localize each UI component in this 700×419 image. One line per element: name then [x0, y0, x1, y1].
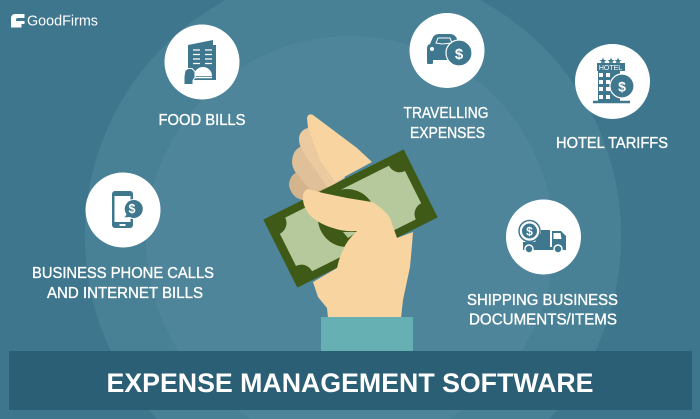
icon: car with dollar coin: $ [455, 46, 464, 63]
cuff [321, 317, 413, 351]
item: business phone calls: AND INTERNET BILLS [47, 285, 203, 302]
label: TRAVELLING [404, 105, 488, 122]
title banner [9, 351, 692, 410]
icon: hotel with dollar coin: HOTEL [599, 65, 622, 72]
icon: truck with dollar coin: $ [526, 224, 533, 238]
icon: hotel with dollar coin [575, 44, 650, 119]
banknote [263, 149, 438, 288]
label: FOOD BILLS [158, 112, 246, 129]
item: food bills [158, 24, 246, 129]
logo: GoodFirms: GoodFirms [27, 14, 98, 30]
item: shipping: DOCUMENTS/ITEMS [469, 312, 617, 328]
back fingers [289, 114, 372, 205]
icon: menu and cloche [164, 24, 240, 100]
illustration: hand holding banknote [263, 114, 438, 351]
label: HOTEL TARIFFS [556, 135, 668, 152]
icon: phone with dollar bubble [86, 172, 160, 248]
icon: phone with dollar bubble: $ [129, 202, 136, 216]
icon: hotel with dollar coin: $ [618, 78, 626, 94]
label: BUSINESS PHONE CALLS [32, 265, 214, 282]
icon: truck with dollar coin [506, 200, 581, 274]
bill centre highlight [343, 232, 357, 238]
item: travelling expenses: EXPENSES [410, 125, 485, 142]
label: SHIPPING BUSINESS [467, 292, 618, 309]
front hand and thumb [303, 189, 413, 318]
item: hotel tariffs [556, 44, 668, 152]
item: travelling expenses [404, 13, 488, 142]
item: business phone calls [32, 172, 214, 302]
title: EXPENSE MANAGEMENT SOFTWARE [106, 368, 594, 398]
item: shipping [467, 200, 618, 328]
